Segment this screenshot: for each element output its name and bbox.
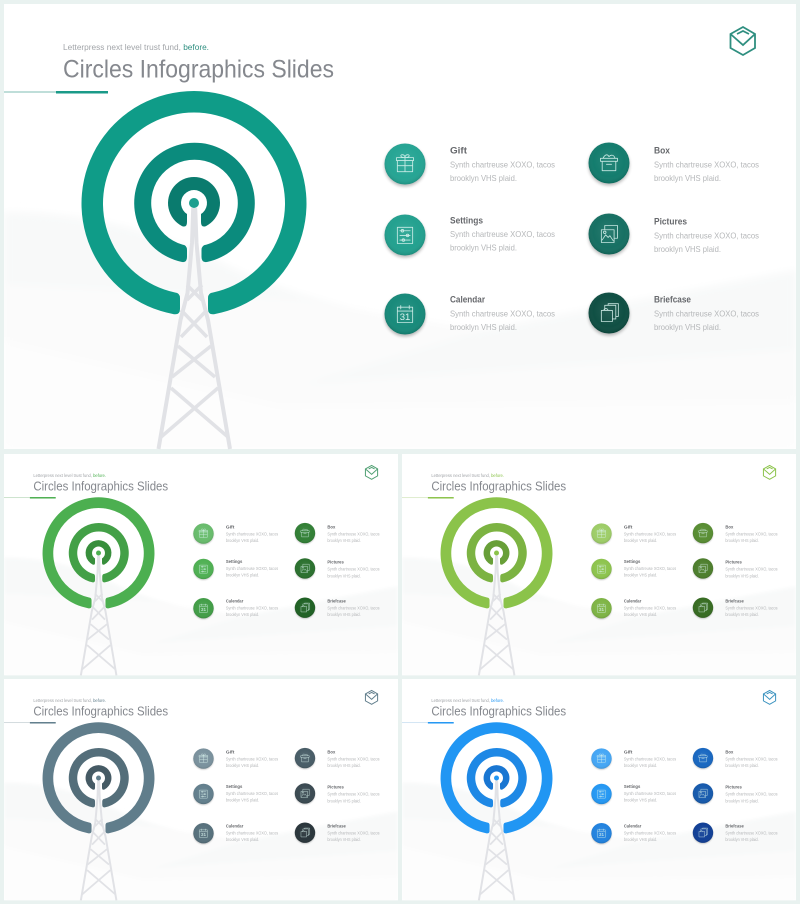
item: settings: Synth chartreuse XOXO, tacos xyxy=(226,791,278,796)
item: gift: Synth chartreuse XOXO, tacos xyxy=(226,756,278,761)
item: briefcase: Synth chartreuse XOXO, tacos xyxy=(654,308,759,318)
item: gift: brooklyn VHS plaid. xyxy=(624,763,657,768)
item: briefcase: Synth chartreuse XOXO, tacos xyxy=(725,830,778,835)
subtitle: Letterpress next level trust fund, before. xyxy=(63,42,209,52)
item: box xyxy=(295,748,380,769)
item: calendar: 31 xyxy=(201,832,206,838)
item: briefcase: brooklyn VHS plaid. xyxy=(725,612,759,617)
title: Circles Infographics Slides xyxy=(33,480,168,494)
title underline xyxy=(402,722,454,724)
logo xyxy=(365,690,378,704)
item: settings: Settings xyxy=(624,559,641,565)
item: gift xyxy=(591,523,676,545)
item: settings xyxy=(193,559,278,580)
item: pictures: brooklyn VHS plaid. xyxy=(725,573,759,578)
item: box: Synth chartreuse XOXO, tacos xyxy=(327,756,380,761)
middle ring xyxy=(134,143,255,262)
item: settings: Settings xyxy=(226,784,243,790)
item: pictures: Synth chartreuse XOXO, tacos xyxy=(725,567,778,572)
item: box: Box xyxy=(725,524,734,530)
signal rings xyxy=(43,497,154,608)
item: box xyxy=(588,142,759,186)
signal rings xyxy=(82,91,306,314)
item: calendar: Synth chartreuse XOXO, tacos xyxy=(450,308,555,318)
item: pictures xyxy=(693,558,778,580)
subtitle: Letterpress next level trust fund, before. xyxy=(33,473,106,478)
item: gift xyxy=(193,523,278,545)
item: calendar: brooklyn VHS plaid. xyxy=(450,322,517,332)
slide: blue xyxy=(402,679,796,900)
tower xyxy=(81,555,116,675)
item: calendar: brooklyn VHS plaid. xyxy=(226,612,259,617)
item: briefcase: Briefcase xyxy=(327,823,346,829)
item: box: Box xyxy=(654,146,671,156)
item: pictures: Synth chartreuse XOXO, tacos xyxy=(327,567,380,572)
item: calendar: Synth chartreuse XOXO, tacos xyxy=(624,605,676,610)
item: briefcase: Synth chartreuse XOXO, tacos xyxy=(327,830,380,835)
item: settings: brooklyn VHS plaid. xyxy=(226,798,259,803)
item: briefcase: brooklyn VHS plaid. xyxy=(327,837,361,842)
subtitle: Letterpress next level trust fund, before. xyxy=(431,698,504,703)
item: pictures: brooklyn VHS plaid. xyxy=(327,798,361,803)
item: settings: Synth chartreuse XOXO, tacos xyxy=(624,566,676,571)
item: calendar: Calendar xyxy=(226,598,243,604)
item: box: brooklyn VHS plaid. xyxy=(327,538,361,543)
item: gift: Synth chartreuse XOXO, tacos xyxy=(450,160,555,170)
item: briefcase xyxy=(693,598,778,619)
item: pictures: Pictures xyxy=(725,560,742,566)
item: settings: Settings xyxy=(450,216,483,226)
item: briefcase xyxy=(295,823,380,844)
item: calendar: brooklyn VHS plaid. xyxy=(624,612,657,617)
item: calendar: Calendar xyxy=(624,823,641,829)
item: settings: Synth chartreuse XOXO, tacos xyxy=(450,229,555,239)
item: box: Synth chartreuse XOXO, tacos xyxy=(327,531,380,536)
item: briefcase: brooklyn VHS plaid. xyxy=(654,322,721,332)
logo: cube xyxy=(730,27,755,55)
item: box: brooklyn VHS plaid. xyxy=(327,763,361,768)
item: pictures xyxy=(588,214,759,256)
title underline xyxy=(4,91,108,94)
tower xyxy=(479,555,514,675)
item: gift: Gift xyxy=(226,749,235,755)
item: box: Box xyxy=(725,749,734,755)
item: briefcase: Synth chartreuse XOXO, tacos xyxy=(725,605,778,610)
item: box: brooklyn VHS plaid. xyxy=(725,763,759,768)
item: box: Synth chartreuse XOXO, tacos xyxy=(725,756,778,761)
item: gift: Gift xyxy=(624,524,633,530)
subtitle: Letterpress next level trust fund, before. xyxy=(33,698,106,703)
item: gift xyxy=(193,748,278,770)
item: settings: Synth chartreuse XOXO, tacos xyxy=(226,566,278,571)
tower xyxy=(158,208,230,449)
title underline xyxy=(4,497,56,499)
signal rings xyxy=(441,497,552,608)
slide: lime xyxy=(402,454,796,675)
item: settings xyxy=(193,784,278,805)
item: box: brooklyn VHS plaid. xyxy=(725,538,759,543)
item: box: Synth chartreuse XOXO, tacos xyxy=(725,531,778,536)
item: box: Box xyxy=(327,749,336,755)
signal rings xyxy=(441,722,552,833)
item: calendar xyxy=(591,823,676,844)
logo xyxy=(763,690,776,704)
item: settings xyxy=(384,214,555,258)
item: briefcase xyxy=(588,292,759,336)
item: gift: brooklyn VHS plaid. xyxy=(226,763,259,768)
item: pictures: Pictures xyxy=(725,785,742,791)
item: pictures: brooklyn VHS plaid. xyxy=(725,798,759,803)
item: pictures: Synth chartreuse XOXO, tacos xyxy=(725,792,778,797)
item: calendar: brooklyn VHS plaid. xyxy=(624,837,657,842)
item: gift: Gift xyxy=(624,749,633,755)
subtitle: Letterpress next level trust fund, before. xyxy=(431,473,504,478)
title underline xyxy=(402,497,454,499)
item: calendar: Calendar xyxy=(624,598,641,604)
item: gift: Gift xyxy=(450,146,468,156)
item: box: brooklyn VHS plaid. xyxy=(654,173,721,183)
item: calendar xyxy=(193,598,278,619)
item: gift: brooklyn VHS plaid. xyxy=(624,538,657,543)
item: briefcase xyxy=(693,823,778,844)
item: pictures: brooklyn VHS plaid. xyxy=(654,244,721,254)
item: settings xyxy=(591,559,676,580)
item: pictures: Pictures xyxy=(327,560,344,566)
item: briefcase: brooklyn VHS plaid. xyxy=(725,837,759,842)
title: Circles Infographics Slides xyxy=(63,56,334,84)
item: box: Synth chartreuse XOXO, tacos xyxy=(654,160,759,170)
tower xyxy=(81,780,116,900)
item: calendar: Synth chartreuse XOXO, tacos xyxy=(226,830,278,835)
item: settings: brooklyn VHS plaid. xyxy=(624,573,657,578)
item: pictures: Pictures xyxy=(654,216,687,228)
item: box xyxy=(295,523,380,544)
item: calendar: 31 xyxy=(599,832,604,838)
item: settings: brooklyn VHS plaid. xyxy=(226,573,259,578)
item: briefcase: Briefcase xyxy=(725,598,744,604)
item: pictures: Pictures xyxy=(327,785,344,791)
item: settings: brooklyn VHS plaid. xyxy=(450,242,517,252)
item: pictures: Synth chartreuse XOXO, tacos xyxy=(327,792,380,797)
item: box: Box xyxy=(327,524,336,530)
item: briefcase: brooklyn VHS plaid. xyxy=(327,612,361,617)
item: pictures: brooklyn VHS plaid. xyxy=(327,573,361,578)
item: calendar: Synth chartreuse XOXO, tacos xyxy=(226,605,278,610)
item: gift: Synth chartreuse XOXO, tacos xyxy=(624,531,676,536)
tower xyxy=(479,780,514,900)
slide: slate xyxy=(4,679,398,900)
slide: green xyxy=(4,454,398,675)
item: calendar: Synth chartreuse XOXO, tacos xyxy=(624,830,676,835)
item: settings xyxy=(591,784,676,805)
item: pictures xyxy=(295,558,380,580)
item: settings: Synth chartreuse XOXO, tacos xyxy=(624,791,676,796)
item: gift xyxy=(591,748,676,770)
item: calendar: Calendar xyxy=(226,823,243,829)
item: settings: brooklyn VHS plaid. xyxy=(624,798,657,803)
item: calendar: 31 xyxy=(201,607,206,613)
item: gift: brooklyn VHS plaid. xyxy=(226,538,259,543)
item: calendar: 31 xyxy=(400,312,410,323)
title underline xyxy=(4,722,56,724)
item: calendar: Calendar xyxy=(450,294,485,306)
item: calendar xyxy=(193,823,278,844)
slide: teal large xyxy=(4,4,796,449)
center dot xyxy=(189,198,199,208)
item: box xyxy=(693,748,778,769)
outer ring xyxy=(82,91,306,314)
item: calendar xyxy=(384,294,555,336)
item: settings: Settings xyxy=(624,784,641,790)
item: briefcase: Briefcase xyxy=(725,823,744,829)
title: Circles Infographics Slides xyxy=(431,705,566,719)
item: calendar xyxy=(591,598,676,619)
item: box xyxy=(693,523,778,544)
item: briefcase: Briefcase xyxy=(654,294,691,306)
title: Circles Infographics Slides xyxy=(33,705,168,719)
signal rings xyxy=(43,722,154,833)
item: briefcase: Synth chartreuse XOXO, tacos xyxy=(327,605,380,610)
logo xyxy=(365,465,378,479)
item: pictures xyxy=(693,783,778,805)
item: pictures xyxy=(295,783,380,805)
title: Circles Infographics Slides xyxy=(431,480,566,494)
item: calendar: 31 xyxy=(599,607,604,613)
logo xyxy=(763,465,776,479)
item: briefcase xyxy=(295,598,380,619)
item: gift xyxy=(384,144,555,186)
item: calendar: brooklyn VHS plaid. xyxy=(226,837,259,842)
inner ring xyxy=(168,177,220,227)
item: gift: Gift xyxy=(226,524,235,530)
slide background xyxy=(4,4,796,449)
item: settings: Settings xyxy=(226,559,243,565)
item: gift: brooklyn VHS plaid. xyxy=(450,173,517,183)
item: briefcase: Briefcase xyxy=(327,598,346,604)
item: gift: Synth chartreuse XOXO, tacos xyxy=(226,531,278,536)
item: gift: Synth chartreuse XOXO, tacos xyxy=(624,756,676,761)
item: pictures: Synth chartreuse XOXO, tacos xyxy=(654,230,759,240)
